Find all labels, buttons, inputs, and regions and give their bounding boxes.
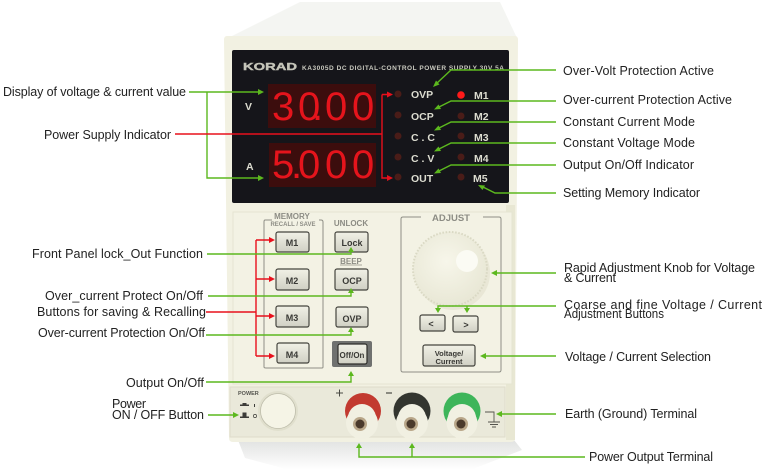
- power caption: POWER: [238, 391, 259, 397]
- status indicators: OVP: [411, 89, 433, 101]
- label: power button: Power: [112, 397, 146, 411]
- label: power button: [112, 397, 204, 422]
- memory indicators: M2: [474, 111, 489, 123]
- adjust group: ADJUST: [432, 213, 470, 224]
- button M4: [277, 343, 309, 363]
- label: display of voltage and current: Display of voltage & current value: [3, 85, 186, 99]
- button voltage current: Current: [435, 357, 463, 366]
- label: setting memory: Setting Memory Indicator: [563, 186, 700, 200]
- adjust group: [401, 213, 501, 372]
- label: coarse and fine: Adjustment Buttons: [564, 307, 664, 321]
- label: coarse and fine: Coarse and fine Voltage / Current: [564, 298, 763, 312]
- label: over-current active: Over-current Protection Active: [563, 93, 732, 107]
- arrow: output terminals: [356, 443, 585, 457]
- status indicators: OUT: [411, 173, 434, 185]
- button right: >: [463, 320, 469, 330]
- button OCP: OCP: [342, 276, 362, 286]
- arrow: ocp: [208, 288, 354, 296]
- button M2: M2: [286, 276, 298, 286]
- arrow: earth: [496, 411, 556, 417]
- button M3: M3: [286, 313, 298, 323]
- minus sign: [386, 392, 392, 394]
- black terminal: [394, 392, 430, 439]
- button Lock: Lock: [341, 238, 363, 248]
- button voltage current: [423, 345, 475, 366]
- green terminal: [444, 392, 480, 438]
- label: front panel lock: Front Panel lock_Out Function: [32, 247, 203, 261]
- current readout: 5.000: [272, 143, 374, 187]
- status indicators: C . V: [411, 153, 434, 165]
- memory group: [264, 212, 323, 368]
- button Off/On: [332, 341, 372, 367]
- arrow: coarse fine: [435, 306, 556, 313]
- memory indicators: M3: [474, 132, 489, 144]
- button Off/On: Off/On: [340, 351, 365, 360]
- arrows: right callouts: [356, 70, 585, 457]
- bottom panel: [230, 387, 505, 439]
- memory indicators: M5: [473, 173, 488, 185]
- power switch symbols: [240, 403, 257, 418]
- ground symbol: [485, 412, 500, 427]
- label: constant voltage: Constant Voltage Mode: [563, 136, 695, 150]
- top cover: [232, 2, 517, 38]
- memory group: RECALL / SAVE: [270, 222, 316, 228]
- button Lock: [335, 232, 368, 252]
- arrow: ovp: [433, 70, 556, 87]
- label: rapid knob: & Current: [564, 271, 617, 285]
- label: output on off: Output On/Off: [126, 376, 205, 390]
- status indicators: [394, 89, 435, 185]
- brand logo: KORAD: [243, 61, 298, 73]
- label: power supply indicator: Power Supply Indicator: [44, 128, 171, 142]
- button OVP: OVP: [342, 314, 362, 324]
- right labels: [563, 64, 763, 464]
- label: saving and recalling: Buttons for saving & Recalling: [37, 305, 206, 319]
- label: over-volt active: Over-Volt Protection Active: [563, 64, 714, 78]
- power button: [258, 391, 298, 431]
- button M1: M1: [286, 238, 298, 248]
- arrow: ocp: [434, 101, 556, 110]
- arrows: left callouts: [175, 89, 393, 418]
- button M3: [276, 306, 309, 327]
- arrow: power button: [208, 412, 239, 418]
- button M1: [276, 232, 309, 252]
- memory indicators: [457, 90, 489, 185]
- status indicators: C . C: [411, 132, 435, 144]
- arrow: ovp: [206, 327, 354, 335]
- arrow: cv: [434, 143, 556, 152]
- label: rapid knob: [564, 261, 755, 285]
- front body: [224, 36, 518, 442]
- arrow: memory buttons: [206, 237, 275, 359]
- button voltage current: Voltage/: [435, 349, 464, 358]
- button M2: [276, 269, 309, 290]
- plus sign: [336, 390, 343, 396]
- label: constant current: Constant Current Mode: [563, 115, 695, 129]
- display panel: [232, 50, 509, 203]
- memory group: MEMORY: [274, 212, 311, 221]
- beep caption: BEEP: [340, 257, 363, 266]
- device: power supply unit: [224, 2, 522, 470]
- button left: <: [428, 319, 434, 329]
- arrow: lock: [207, 247, 354, 254]
- label: output indicator: Output On/Off Indicator: [563, 158, 694, 172]
- label: earth terminal: Earth (Ground) Terminal: [565, 407, 697, 421]
- label: power button: ON / OFF Button: [112, 408, 204, 422]
- current label: A: [246, 161, 254, 173]
- label: voltage current selection: Voltage / Current Selection: [565, 350, 711, 364]
- left labels: [3, 85, 206, 422]
- arrow: out: [434, 165, 556, 174]
- voltage label: V: [245, 101, 252, 113]
- voltage readout: 30.00: [272, 85, 374, 129]
- arrow: knob: [491, 270, 556, 276]
- arrow: off on: [206, 371, 354, 382]
- status indicators: OCP: [411, 111, 434, 123]
- arrow: m5: [478, 185, 556, 193]
- button right: [453, 316, 478, 332]
- arrow: display readouts: [189, 89, 264, 181]
- adjust knob: [413, 232, 490, 310]
- model text: KA3005D DC DIGITAL-CONTROL POWER SUPPLY 30V 5A: [302, 65, 504, 72]
- arrow: indicators: [175, 92, 393, 181]
- memory indicators: M1: [474, 90, 489, 102]
- button M4: M4: [286, 350, 298, 360]
- label: over-current protection: Over-current Protection On/Off: [38, 326, 206, 340]
- unlock caption: UNLOCK: [334, 219, 368, 228]
- label: over current protect: Over_current Protect On/Off: [45, 289, 204, 303]
- button OCP: [335, 269, 368, 290]
- drop shadow: [238, 440, 522, 470]
- label: coarse and fine: [564, 298, 763, 321]
- label: power output terminal: Power Output Terminal: [589, 450, 713, 464]
- label: rapid knob: Rapid Adjustment Knob for Voltage: [564, 261, 755, 275]
- control panel: [233, 212, 512, 384]
- red terminal: [345, 393, 381, 439]
- arrow: cc: [434, 122, 556, 130]
- arrow: selection: [480, 353, 556, 359]
- button left: [420, 315, 445, 331]
- memory indicators: M4: [474, 153, 489, 165]
- button OVP: [336, 307, 368, 327]
